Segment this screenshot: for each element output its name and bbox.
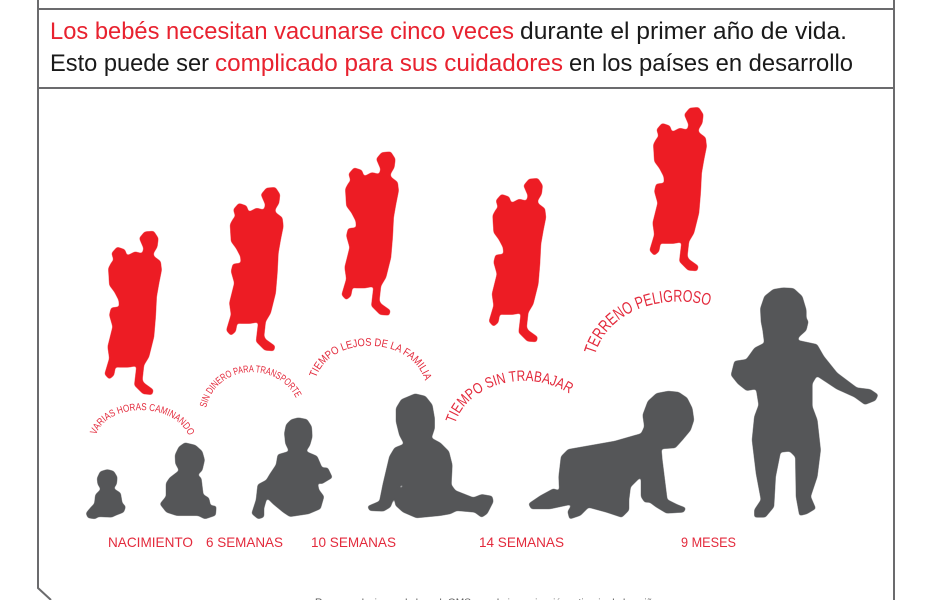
icon: mother 2 carrying baby: [227, 188, 283, 350]
icon: newborn baby silhouette: [87, 470, 125, 518]
curved label: terreno peligroso: TERRENO PELIGROSO: [584, 290, 711, 352]
icon: mother 3 carrying baby: [342, 152, 398, 315]
icon: 6 week baby silhouette: [161, 443, 216, 518]
age label: nacimiento: NACIMIENTO: [108, 534, 193, 550]
icon: crawling baby silhouette: [529, 392, 693, 518]
icon: mother 1 carrying baby: [105, 232, 161, 394]
icon: mother 5 carrying baby: [650, 108, 706, 270]
age label: 6 semanas: 6 SEMANAS: [206, 534, 283, 550]
heading: Esto puede ser: [50, 50, 209, 77]
curved label: varias horas caminando: VARIAS HORAS CAMINANDO: [90, 403, 194, 434]
age label: 10 semanas: 10 SEMANAS: [311, 534, 396, 550]
icon: mother 4 carrying baby: [490, 179, 545, 341]
curved label: sin dinero para transporte: SIN DINERO PARA TRANSPORTE: [200, 365, 302, 408]
curved label: tiempo lejos de la familia: TIEMPO LEJOS DE LA FAMILIA: [309, 338, 432, 381]
icon: standing baby silhouette: [732, 288, 877, 517]
heading: durante el primer año de vida.: [520, 18, 847, 45]
age label: 9 meses: 9 MESES: [681, 534, 736, 550]
heading: complicado para sus cuidadores: [215, 50, 563, 77]
heading: Los bebés necesitan vacunarse cinco veces: [50, 18, 514, 45]
icon: 14 week baby silhouette: [368, 394, 493, 517]
heading: en los países en desarrollo: [569, 50, 853, 77]
heading: [50, 18, 853, 77]
curved label: tiempo sin trabajar: TIEMPO SIN TRABAJAR: [445, 370, 573, 421]
icon: 10 week baby silhouette: [252, 418, 332, 518]
age label: 14 semanas: 14 SEMANAS: [479, 534, 564, 550]
